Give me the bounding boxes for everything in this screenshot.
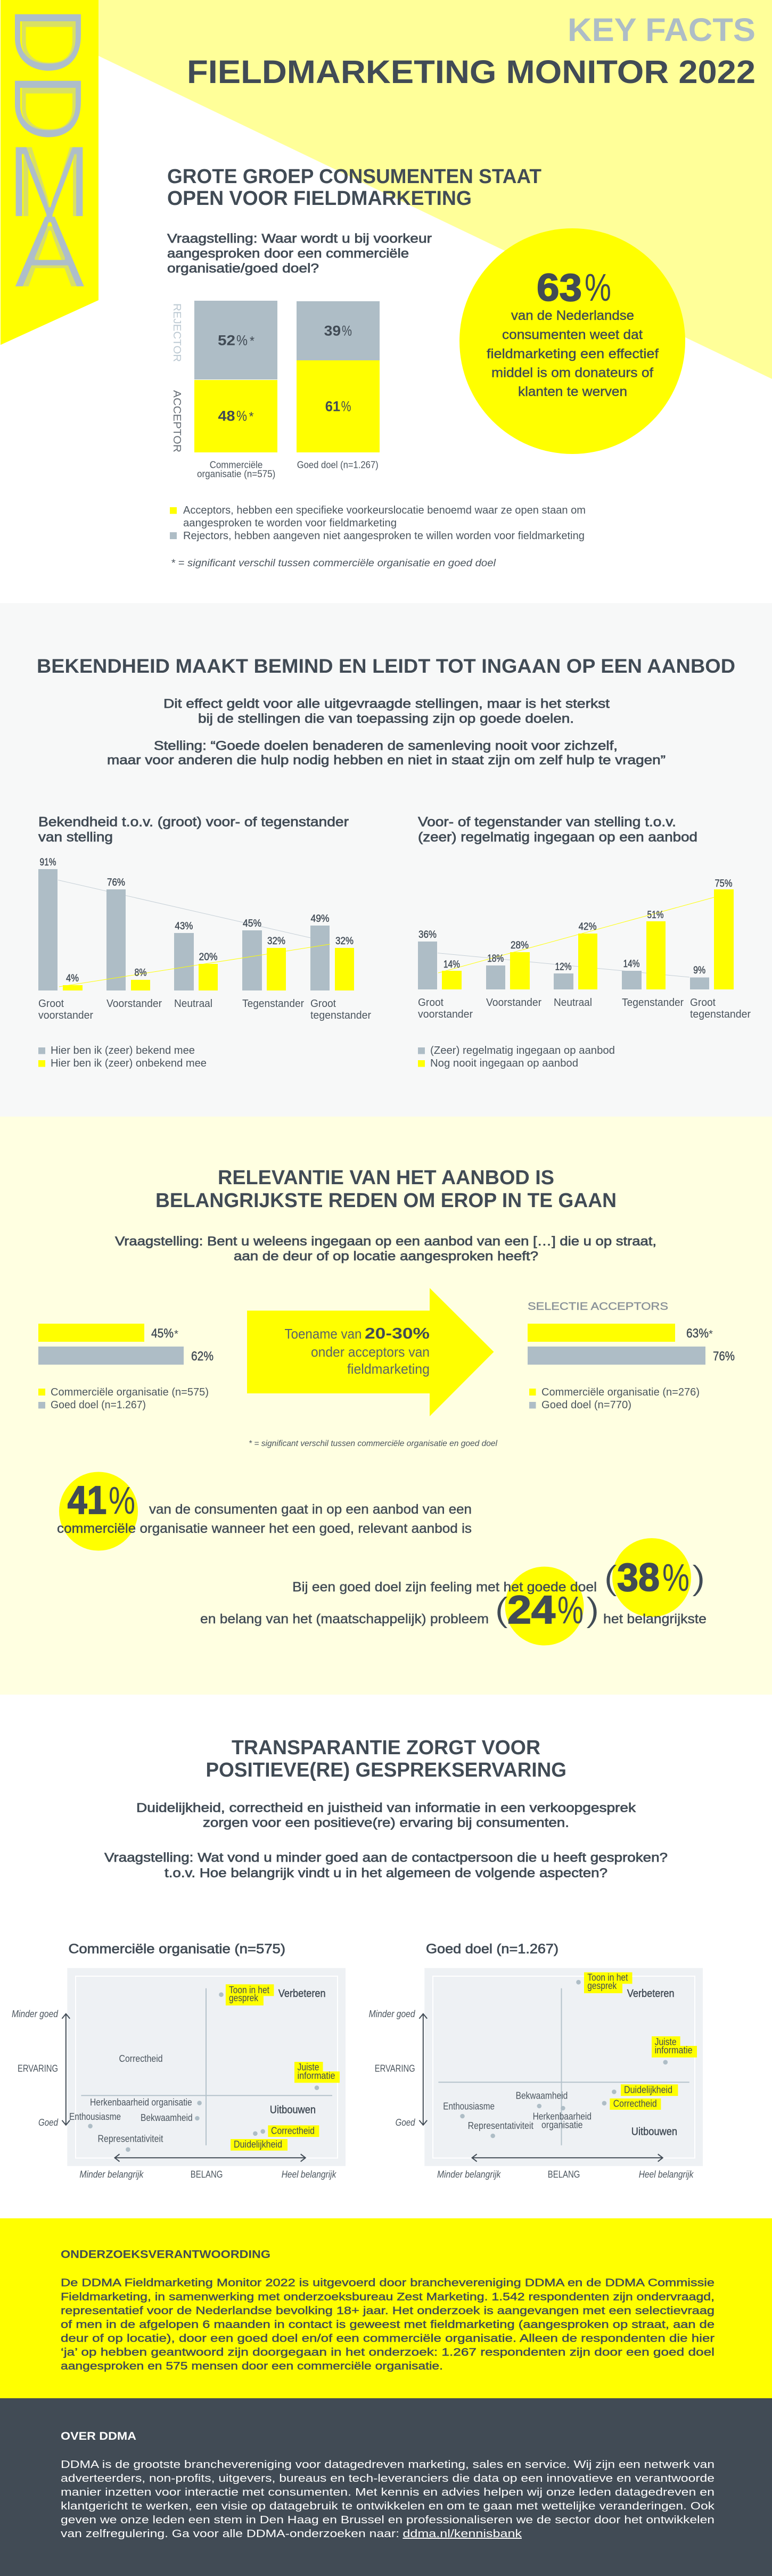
callout circle: 63%: klanten te werven [518, 384, 627, 399]
bar chart: awareness by stance: Voorstander [106, 998, 162, 1010]
heading: ONDERZOEKSVERANTWOORDING [61, 2248, 270, 2260]
stacked bar chart: acceptors and rejectors: % [342, 323, 352, 339]
callout circle: 63% [459, 228, 685, 454]
quadrant chart: good cause: Correctheid [613, 2099, 657, 2109]
arrow: increase among acceptors: Toename van [284, 1326, 362, 1342]
body text: deur of op locatie), door een goed doel en/of een commerciële organisatie. Alleen de respondenten die hier [61, 2333, 714, 2344]
body text: aangesproken en 575 mensen door een commerciële organisatie. [61, 2360, 443, 2372]
quadrant chart: good cause: Herkenbaarheid [533, 2111, 592, 2122]
chart title: left [38, 814, 349, 845]
bar chart: all respondents: 45% [151, 1326, 174, 1341]
quadrant chart: good cause: ERVARING [375, 2063, 415, 2074]
bar chart: awareness by stance [38, 857, 371, 1021]
bar chart: awareness by stance: 49% [311, 913, 330, 924]
quadrant chart: good cause: Uitbouwen [631, 2126, 677, 2137]
quadrant chart: good cause: Goed [396, 2117, 415, 2128]
stacked bar chart: acceptors and rejectors: 39 [324, 323, 341, 339]
legend: right chart: Nog nooit ingegaan op aanbod [430, 1058, 578, 1069]
chart title: good cause: Goed doel (n=1.267) [426, 1942, 559, 1956]
body text [61, 2277, 714, 2372]
logo banner: DDMA: A [13, 193, 86, 310]
heading: OVER DDMA [61, 2430, 136, 2442]
question text: aan de deur of op locatie aangesproken heeft? [234, 1249, 538, 1264]
callout: 24%: ( [495, 1590, 508, 1629]
legend: all respondents: Commerciële organisatie (n=575) [51, 1386, 209, 1398]
callout: 38%: Bij een goed doel zijn feeling met het goede doel [292, 1580, 597, 1595]
stacked bar chart: acceptors and rejectors: * [249, 410, 253, 424]
logo banner: DDMA [0, 0, 103, 345]
stacked bar chart: acceptors and rejectors: * [250, 334, 254, 348]
quadrant chart: commercial organisation: Juiste [297, 2062, 319, 2073]
intro text: maar voor anderen die hulp nodig hebben en niet in staat zijn om zelf hulp te vragen” [107, 753, 666, 767]
callout circle: 63%: fieldmarketing een effectief [487, 346, 659, 361]
quadrant chart: good cause: gesprek [587, 1980, 617, 1991]
logo banner: DDMA: D [3, 80, 95, 139]
body text: geven we onze leden een stem in Den Haag en Brussel en professionaliseren we de sector door het ontwikkelen [61, 2514, 714, 2526]
intro text [104, 1801, 668, 1880]
body text [61, 2459, 715, 2540]
legend: selected acceptors [529, 1386, 700, 1411]
quadrant chart: good cause: Toon in het [587, 1972, 628, 1983]
section heading: GROTE GROEP CONSUMENTEN STAAT [167, 166, 541, 188]
stacked bar chart: acceptors and rejectors: Commerciële [210, 459, 262, 470]
bar chart: stance by offer acceptance: Groot [418, 997, 444, 1009]
question text: aangesproken door een commerciële [167, 246, 409, 261]
callout: 38% [292, 1538, 705, 1617]
body text: DDMA is de grootste branchevereniging voor datagedreven marketing, sales en service. Wij zijn een netwerk van [61, 2459, 714, 2471]
intro text: t.o.v. Hoe belangrijk vindt u in het algemeen de volgende aspecten? [165, 1866, 607, 1880]
stacked bar chart: acceptors and rejectors: % [341, 399, 351, 415]
bar chart: awareness by stance: Groot [310, 998, 336, 1010]
quadrant chart: commercial organisation: Verbeteren [278, 1988, 326, 2000]
bar chart: stance by offer acceptance: tegenstander [690, 1009, 751, 1020]
bar chart: awareness by stance: 20% [199, 952, 218, 963]
callout: 24% [200, 1567, 599, 1646]
intro text: Vraagstelling: Wat vond u minder goed aan de contactpersoon die u heeft gesproken? [104, 1851, 668, 1865]
section heading [155, 1167, 617, 1212]
bar chart: selected acceptors: 63% [686, 1326, 709, 1341]
arrow: increase among acceptors [247, 1288, 494, 1416]
stacked bar chart: acceptors and rejectors: % [236, 408, 247, 424]
bar chart: stance by offer acceptance: 14% [623, 959, 640, 970]
bar chart: awareness by stance: voorstander [38, 1010, 93, 1021]
body text: van zelfregulering. Ga voor alle DDMA-onderzoeken naar: [61, 2528, 399, 2540]
chart title: commercial organisation: Commerciële organisatie (n=575) [68, 1942, 285, 1956]
bar chart: awareness by stance: 8% [134, 968, 147, 978]
intro text: zorgen voor een positieve(re) ervaring bij consumenten. [203, 1816, 569, 1830]
bar chart: stance by offer acceptance: Groot [690, 997, 716, 1009]
quadrant chart: commercial organisation: Correctheid [271, 2125, 315, 2136]
bar chart: stance by offer acceptance: 18% [487, 953, 504, 964]
legend: selected acceptors: Goed doel (n=770) [541, 1399, 631, 1411]
callout circle: 63%: % [585, 267, 611, 309]
quadrant chart: good cause: BELANG [548, 2169, 580, 2180]
body text: of men in de afgelopen 6 maanden in contact is geweest met fieldmarketing (aangesproken op straat, aan de [61, 2319, 714, 2331]
bar chart: awareness by stance: 45% [243, 918, 261, 929]
callout: 38%: 38 [617, 1555, 660, 1599]
section heading: BEKENDHEID MAAKT BEMIND EN LEIDT TOT INGAAN OP EEN AANBOD [37, 655, 735, 677]
quadrant chart: good cause: Heel belangrijk [639, 2169, 694, 2180]
label: selectie acceptors: SELECTIE ACCEPTORS [528, 1301, 668, 1312]
quadrant chart: commercial organisation: Herkenbaarheid organisatie [90, 2097, 192, 2108]
legend: left chart [38, 1045, 207, 1069]
question text: organisatie/goed doel? [167, 261, 319, 276]
logo banner: DDMA: M [15, 123, 86, 240]
bar chart: awareness by stance: Groot [38, 998, 64, 1010]
stacked bar chart: acceptors and rejectors: 48 [218, 408, 235, 424]
quadrant chart: commercial organisation: Correctheid [119, 2053, 163, 2064]
quadrant chart: good cause: organisatie [541, 2120, 582, 2131]
quadrant chart: commercial organisation: Duidelijkheid [234, 2139, 282, 2150]
legend: acceptors and rejectors: aangesproken te worden voor fieldmarketing [183, 517, 397, 529]
bar chart: awareness by stance: 4% [66, 973, 79, 984]
callout circle: 63%: middel is om donateurs of [491, 365, 653, 380]
body text: klantgericht te werken, een visie op datagebruik te ontwikkelen en om te gaan met wettelijke veranderingen. Ook [61, 2500, 715, 2512]
quadrant chart: commercial organisation: Goed [38, 2117, 59, 2128]
quadrant chart: good cause: Representativiteit [468, 2120, 533, 2131]
bar chart: awareness by stance: 43% [175, 921, 193, 932]
legend: acceptors and rejectors: Acceptors, hebben een specifieke voorkeurslocatie benoemd waar ze open staan om [183, 505, 586, 516]
bar chart: awareness by stance: tegenstander [310, 1010, 371, 1021]
quadrant chart: commercial organisation: Uitbouwen [270, 2104, 316, 2116]
callout: 38%: ) [692, 1558, 705, 1597]
panel: about DDMA [0, 2398, 772, 2576]
callout: 41%: % [109, 1480, 135, 1522]
quadrant chart: commercial organisation: Heel belangrijk [282, 2169, 336, 2180]
question text [167, 232, 432, 276]
quadrant chart: good cause: Enthousiasme [443, 2101, 495, 2111]
panel: research methodology [0, 2218, 772, 2398]
callout circle: 63%: 63 [537, 267, 582, 309]
callout: 24%: 24 [507, 1588, 555, 1632]
quadrant chart: commercial organisation: Representativiteit [98, 2133, 163, 2144]
logo banner: DDMA: D [3, 14, 95, 73]
body text: representatief voor de Nederlandse bevolking 18+ jaar. Het onderzoek is aangevangen met een selectievraag [61, 2305, 714, 2317]
bar chart: awareness by stance: Tegenstander [242, 998, 304, 1010]
callout: 38%: ( [604, 1558, 618, 1597]
callout circle: 63%: van de Nederlandse [511, 308, 634, 323]
callout circle: 63%: consumenten weet dat [502, 327, 643, 342]
panel: header and consumer openness section [0, 0, 772, 569]
quadrant chart: commercial organisation: Bekwaamheid [141, 2112, 193, 2123]
logo banner: DDMA: A [21, 206, 79, 307]
bar chart: stance by offer acceptance: Tegenstander [622, 997, 684, 1009]
quadrant chart: commercial organisation: Minder goed [12, 2009, 59, 2019]
chart title: right: Voor- of tegenstander van stelling t.o.v. [418, 814, 676, 829]
main title: FIELDMARKETING MONITOR 2022 [187, 54, 755, 90]
quadrant chart: good cause: Bekwaamheid [516, 2090, 568, 2101]
panel: relevance section [0, 1117, 772, 1695]
logo banner: DDMA: M [6, 124, 92, 240]
intro text: bij de stellingen die van toepassing zijn op goede doelen. [198, 712, 574, 726]
kicker: key facts: KEY FACTS [568, 12, 755, 48]
quadrant chart: good cause: Juiste [655, 2036, 677, 2047]
stacked bar chart: acceptors and rejectors: Goed doel (n=1.267) [297, 459, 379, 470]
text: het belangrijkste: het belangrijkste [603, 1612, 707, 1626]
callout: 41%: van de consumenten gaat in op een aanbod van een [149, 1502, 472, 1517]
section heading: RELEVANTIE VAN HET AANBOD IS [218, 1167, 554, 1189]
bar chart: stance by offer acceptance: 28% [511, 940, 529, 951]
bar chart: awareness by stance: 32% [267, 936, 285, 947]
chart title: right: (zeer) regelmatig ingegaan op een aanbod [418, 830, 697, 845]
bar chart: stance by offer acceptance [418, 878, 751, 1020]
quadrant chart: good cause: Minder goed [369, 2009, 415, 2019]
body text: manier inzetten voor interactie met consumenten. Met kennis en advies helpen wij onze leden datagedreven en [61, 2487, 714, 2498]
callout: 41% [57, 1472, 472, 1551]
panel: transparency section [0, 1695, 772, 2218]
section heading: TRANSPARANTIE ZORGT VOOR [232, 1737, 540, 1759]
stacked bar chart: acceptors and rejectors: organisatie (n=575) [197, 469, 275, 480]
bar chart: awareness by stance: Neutraal [174, 998, 212, 1010]
section heading: POSITIEVE(RE) GESPREKSERVARING [206, 1759, 566, 1781]
callout: 41%: commerciële organisatie wanneer het een goed, relevant aanbod is [57, 1521, 472, 1536]
arrow: increase among acceptors: fieldmarketing [347, 1361, 430, 1377]
intro text [107, 697, 666, 767]
stacked bar chart: acceptors and rejectors [171, 301, 380, 480]
callout: 41%: 41 [68, 1478, 106, 1522]
bar chart: all respondents [38, 1324, 213, 1365]
stacked bar chart: acceptors and rejectors: REJECTOR [171, 303, 183, 362]
quadrant chart: commercial organisation: BELANG [191, 2169, 223, 2180]
legend: acceptors and rejectors: Rejectors, hebben aangeven niet aangesproken te willen worden voor fieldmarketing [183, 530, 585, 542]
section heading [167, 166, 541, 210]
bar chart: stance by offer acceptance: Voorstander [486, 997, 541, 1009]
stacked bar chart: acceptors and rejectors: ACCEPTOR [171, 390, 183, 452]
section heading: OPEN VOOR FIELDMARKETING [167, 187, 472, 210]
bar chart: stance by offer acceptance: voorstander [418, 1009, 473, 1020]
section heading: BELANGRIJKSTE REDEN OM EROP IN TE GAAN [155, 1190, 617, 1212]
question text: Vraagstelling: Bent u weleens ingegaan op een aanbod van een […] die u op straat, [115, 1234, 656, 1249]
callout: 38%: % [662, 1557, 689, 1599]
stacked bar chart: acceptors and rejectors: 52 [218, 332, 235, 348]
bar chart: stance by offer acceptance: 42% [579, 921, 597, 932]
arrow: importance axis [472, 2154, 663, 2161]
footnote: * = significant verschil tussen commerciële organisatie en goed doel [249, 1439, 497, 1448]
bar chart: awareness by stance: 32% [335, 936, 354, 947]
chart title: left: Bekendheid t.o.v. (groot) voor- of tegenstander [38, 814, 349, 829]
bar chart: stance by offer acceptance: Neutraal [554, 997, 592, 1009]
bar chart: stance by offer acceptance: 36% [418, 929, 437, 940]
quadrant chart: commercial organisation: informatie [297, 2070, 335, 2081]
quadrant chart: good cause: informatie [655, 2045, 693, 2055]
body text: De DDMA Fieldmarketing Monitor 2022 is uitgevoerd door branchevereniging DDMA en de DDMA Commissie [61, 2277, 714, 2289]
bar chart: selected acceptors: 76% [713, 1349, 735, 1364]
callout: 24%: % [557, 1589, 584, 1632]
stacked bar chart: acceptors and rejectors: 61 [325, 399, 340, 415]
legend: acceptors and rejectors [170, 505, 586, 542]
footnote: * = significant verschil tussen commerciële organisatie en goed doel [171, 558, 496, 569]
chart title: left: van stelling [38, 830, 113, 845]
bar chart: stance by offer acceptance: 12% [555, 961, 572, 973]
section heading [206, 1737, 566, 1781]
quadrant chart: commercial organisation: Minder belangrijk [79, 2169, 144, 2180]
body text: ‘ja’ op hebben geantwoord zijn doorgegaan in het onderzoek: 1.267 respondenten zijn door een goed doel [61, 2347, 714, 2358]
legend: left chart: Hier ben ik (zeer) bekend mee [51, 1045, 195, 1056]
bar chart: awareness by stance: 76% [107, 877, 125, 888]
bar chart: selected acceptors: * [709, 1328, 713, 1340]
legend: all respondents: Goed doel (n=1.267) [51, 1399, 146, 1411]
bar chart: stance by offer acceptance: 75% [714, 878, 733, 889]
callout: 24%: en belang van het (maatschappelijk) probleem [200, 1612, 489, 1626]
callout: 24%: ) [586, 1590, 599, 1629]
body text: adverteerders, non-profits, uitgevers, bureaus en tech-leveranciers die data op een innovatieve en verantwoorde [61, 2473, 714, 2484]
intro text: Stelling: “Goede doelen benaderen de samenleving nooit voor zichzelf, [154, 739, 618, 753]
arrow: increase among acceptors: 20-30% [365, 1325, 430, 1342]
arrow: experience axis [419, 2014, 427, 2125]
quadrant chart: commercial organisation: Enthousiasme [69, 2111, 121, 2122]
quadrant chart: commercial organisation [12, 1968, 346, 2180]
bar chart: stance by offer acceptance: 14% [444, 959, 460, 970]
bar chart: stance by offer acceptance: 9% [693, 965, 705, 976]
quadrant chart: good cause: Minder belangrijk [437, 2169, 501, 2180]
quadrant chart: commercial organisation: Toon in het [229, 1985, 269, 1995]
bar chart: selected acceptors [528, 1324, 735, 1365]
intro text: Duidelijkheid, correctheid en juistheid van informatie in een verkoopgesprek [136, 1801, 636, 1815]
chart title: right [418, 814, 697, 845]
quadrant chart: good cause [369, 1968, 703, 2180]
arrow: importance axis [115, 2154, 306, 2161]
body text: ddma.nl/kennisbank [403, 2528, 522, 2540]
quadrant chart: good cause: Verbeteren [627, 1988, 675, 2000]
bar chart: awareness by stance: 91% [39, 857, 56, 868]
quadrant chart: commercial organisation: ERVARING [18, 2063, 58, 2074]
legend: selected acceptors: Commerciële organisatie (n=276) [541, 1386, 700, 1398]
quadrant chart: commercial organisation: gesprek [229, 1993, 259, 2003]
arrow: experience axis [62, 2014, 70, 2125]
bar chart: all respondents: 62% [191, 1349, 213, 1364]
legend: right chart: (Zeer) regelmatig ingegaan op aanbod [430, 1045, 615, 1056]
stacked bar chart: acceptors and rejectors: % [236, 332, 248, 348]
legend: left chart: Hier ben ik (zeer) onbekend mee [51, 1058, 207, 1069]
quadrant chart: good cause: Duidelijkheid [624, 2085, 672, 2095]
panel: awareness section [0, 603, 772, 1117]
bar chart: stance by offer acceptance: 51% [647, 910, 664, 921]
bar chart: all respondents: * [174, 1328, 178, 1340]
arrow: increase among acceptors: onder acceptors van [311, 1344, 430, 1360]
question text: Vraagstelling: Waar wordt u bij voorkeur [167, 232, 432, 246]
body text: Fieldmarketing, in samenwerking met onderzoeksbureau Zest Marketing. 1.542 respondenten zijn ondervraagd, [61, 2291, 714, 2303]
legend: all respondents [38, 1386, 209, 1411]
question text [115, 1234, 656, 1264]
legend: right chart [418, 1045, 615, 1069]
intro text: Dit effect geldt voor alle uitgevraagde stellingen, maar is het sterkst [163, 697, 610, 711]
